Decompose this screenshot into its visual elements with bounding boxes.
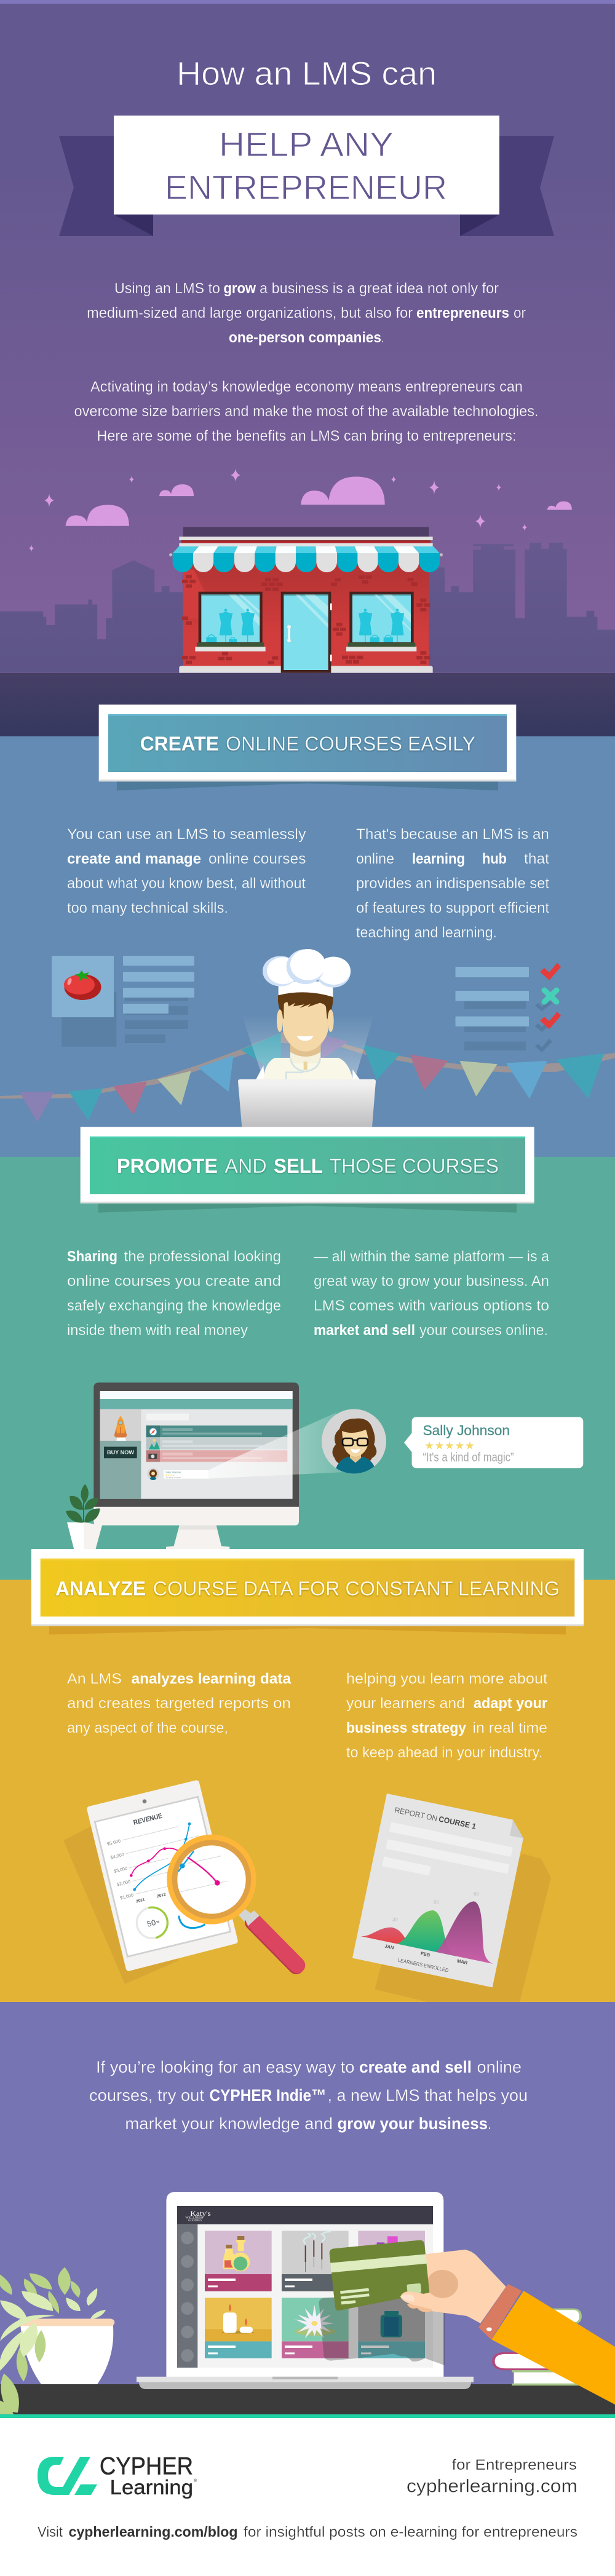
promote: right paragraph: LMS comes with various options to — [314, 1298, 549, 1314]
footer blog line: cypherlearning.com/blog — [69, 2524, 237, 2540]
shop sidebar — [177, 2224, 197, 2368]
course card with tomato — [52, 956, 194, 1047]
product card: lotus — [282, 2298, 349, 2358]
icon: tomato — [64, 971, 101, 1000]
bunting flags — [20, 1033, 604, 1122]
promote: left paragraph: safely exchanging the knowledge — [67, 1298, 281, 1314]
green section background — [0, 1157, 615, 1580]
analyze: right paragraph — [346, 1671, 547, 1761]
awning hooks — [169, 553, 172, 556]
intro paragraph 1: a business is a great idea not only for — [260, 280, 499, 297]
quiz checklist — [455, 963, 561, 1052]
logo wordmark learning: Learning — [110, 2476, 193, 2499]
star rating: ★★★★★ — [424, 1440, 475, 1452]
card and thumb — [330, 2240, 443, 2312]
shadow checks — [535, 1001, 552, 1052]
analyze: right paragraph: business strategy — [346, 1720, 467, 1736]
mini testimonial: Sally Johnson — [165, 1470, 181, 1473]
year labels — [136, 1893, 167, 1904]
store wall — [183, 553, 429, 668]
promote: left paragraph — [67, 1248, 281, 1339]
testimonial avatar — [322, 1409, 386, 1475]
chart value labels: 30 — [392, 1916, 399, 1923]
potted plant — [66, 1484, 102, 1550]
face — [342, 1430, 368, 1457]
create: right paragraph: online — [356, 851, 394, 867]
year labels: 2011 — [136, 1897, 146, 1904]
blue section background — [0, 736, 615, 1157]
sleeve — [491, 2291, 615, 2405]
ribbon right tail — [460, 136, 554, 236]
laptop lid — [166, 2192, 443, 2377]
magnifier lens — [167, 1835, 256, 1924]
footer right text: cypherlearning.com — [407, 2476, 577, 2496]
door — [281, 592, 332, 673]
closing paragraph: , a new LMS that helps you — [327, 2086, 528, 2105]
hair — [278, 992, 333, 1019]
closing paragraph: CYPHER Indie™ — [209, 2086, 326, 2105]
palm shadow — [427, 2270, 458, 2298]
hand holding credit card — [330, 2240, 615, 2405]
chart value labels — [392, 1891, 480, 1923]
chart month labels: FEB — [420, 1951, 431, 1958]
create: right paragraph: of features to support efficient — [356, 900, 549, 916]
stack of books — [493, 2309, 584, 2385]
text bars — [123, 956, 194, 1014]
create: right paragraph — [356, 826, 549, 941]
shirt cuff — [478, 2284, 522, 2339]
chart axis labels: $5,000 — [106, 1838, 121, 1847]
store base — [179, 666, 281, 673]
title: help any: HELP ANY — [219, 125, 394, 163]
magnifier handle — [239, 1907, 297, 1966]
closing paragraph: online — [477, 2058, 522, 2076]
store roof — [183, 527, 429, 537]
shop logo: GOODIES — [188, 2219, 202, 2222]
intro paragraph 1: entrepreneurs — [416, 305, 509, 321]
shop logo — [185, 2209, 211, 2222]
hand shadow on screen — [319, 2294, 445, 2365]
analyze: left paragraph: and creates targeted reports on — [67, 1695, 291, 1712]
intro paragraph 1: medium-sized and large organizations, but also for — [87, 305, 413, 321]
chart axis labels — [106, 1838, 134, 1901]
thumb — [400, 2291, 443, 2312]
chart grid lines — [122, 1827, 234, 1912]
monitor stand — [166, 1526, 229, 1550]
banner shadow — [98, 1203, 517, 1213]
product card: incense — [282, 2231, 349, 2291]
promote: left paragraph: online courses you create and — [67, 1273, 281, 1290]
intro paragraph 1: . — [381, 329, 384, 346]
logo mark — [38, 2457, 97, 2495]
create: right paragraph: learning — [412, 851, 465, 867]
cornice — [179, 537, 433, 540]
product card: candles — [205, 2298, 272, 2358]
create: left paragraph: create and manage — [67, 851, 201, 867]
laptop — [137, 2192, 474, 2389]
create: left paragraph: You can use an LMS to seamlessly — [67, 826, 306, 843]
title: entrepreneur: ENTREPRENEUR — [165, 168, 447, 207]
heading 2 text: PROMOTE — [117, 1155, 218, 1177]
teal rule — [0, 2414, 615, 2418]
chart value labels: 60 — [474, 1891, 480, 1897]
banner frame — [31, 1549, 584, 1626]
monitor chin — [93, 1507, 299, 1526]
books overlap and sleeve — [419, 2250, 615, 2405]
banner frame — [99, 704, 516, 781]
promote: right paragraph: market and sell — [314, 1322, 415, 1339]
chart axis labels: $1,000 — [119, 1892, 134, 1901]
promote: right paragraph: — all within the same platform — is a — [314, 1248, 550, 1265]
product card: oils — [205, 2231, 272, 2291]
heading 2 banner — [81, 1127, 534, 1213]
ribbon white panel — [114, 116, 499, 215]
footer blog line: Visit — [38, 2524, 63, 2540]
donut blue — [179, 1916, 205, 1928]
chart axis labels: $2,000 — [116, 1878, 131, 1888]
create: left paragraph: online courses — [208, 851, 306, 867]
page — [352, 1794, 523, 1987]
chart title: REVENUE — [133, 1813, 164, 1827]
mini testimonial: “It's a kind of magic” — [165, 1476, 181, 1478]
create: left paragraph — [67, 826, 306, 916]
tablet camera — [143, 1799, 146, 1803]
footer right text: for Entrepreneurs — [452, 2457, 577, 2473]
create: right paragraph: provides an indispensable set — [356, 875, 549, 892]
analyze: left paragraph: An LMS — [67, 1671, 122, 1687]
city skyline — [0, 543, 615, 673]
footer blog line — [38, 2524, 577, 2540]
intro paragraph 2: Here are some of the benefits an LMS can bring to entrepreneurs: — [97, 428, 517, 444]
cypher learning logo — [38, 2452, 197, 2499]
card chip — [407, 2283, 421, 2294]
heading 3 text: COURSE DATA FOR CONSTANT LEARNING — [153, 1577, 560, 1599]
area chart — [360, 1901, 493, 1964]
credit card — [330, 2240, 429, 2310]
tablet with revenue chart — [90, 1783, 297, 1968]
leaves — [0, 2267, 81, 2414]
banner inner — [108, 714, 507, 772]
page fold — [510, 1820, 523, 1838]
intro paragraph 1: or — [514, 305, 526, 321]
icon: rocket — [114, 1416, 127, 1441]
awning — [173, 546, 440, 572]
analyze: right paragraph: to keep ahead in your industry. — [346, 1744, 542, 1761]
left window — [195, 592, 266, 652]
closing paragraph: create and sell — [359, 2058, 472, 2076]
placeholder text bars — [382, 1822, 513, 1875]
logo wordmark cypher: CYPHER — [100, 2452, 193, 2479]
analyze: right paragraph: adapt your — [474, 1695, 547, 1712]
shop screen — [177, 2206, 445, 2368]
product card: soap — [358, 2231, 425, 2274]
clouds — [66, 476, 572, 526]
promote: right paragraph — [314, 1248, 550, 1339]
banner inner — [90, 1136, 525, 1194]
storefront — [169, 527, 443, 673]
title line: How an LMS can: How an LMS can — [177, 55, 437, 92]
promote: left paragraph: Sharing — [67, 1248, 117, 1265]
chef jacket — [263, 1058, 353, 1080]
donut 50 percent: 50 — [146, 1918, 157, 1929]
ribbon left fold — [114, 215, 153, 236]
laptop base — [137, 2377, 474, 2382]
footer right text — [407, 2457, 577, 2496]
heading 2 text — [117, 1155, 499, 1177]
closing paragraph: market your knowledge and — [125, 2114, 333, 2133]
closing paragraph — [89, 2058, 528, 2133]
analyze: right paragraph: helping you learn more about — [346, 1671, 547, 1687]
bricks — [182, 575, 430, 664]
revenue lines — [135, 1824, 189, 1889]
create: right paragraph: teaching and learning. — [356, 924, 497, 941]
donut 50 percent — [137, 1907, 167, 1938]
icon: red check — [540, 963, 561, 980]
card shadows — [62, 992, 188, 1047]
top strip — [0, 0, 615, 4]
hair — [332, 1419, 376, 1463]
intro paragraph 2 — [74, 379, 539, 444]
heading 3 banner — [31, 1549, 584, 1634]
tablet shadow — [63, 1819, 178, 1984]
course row 2 — [146, 1438, 287, 1449]
create: left paragraph: too many technical skills. — [67, 900, 228, 916]
create: right paragraph: hub — [482, 851, 507, 867]
intro paragraph 2: overcome size barriers and make the most of the available technologies. — [74, 403, 539, 420]
intro paragraph 1: grow — [224, 280, 256, 297]
cuff button — [486, 2327, 492, 2331]
promote: left paragraph: the professional looking — [124, 1248, 281, 1265]
card stripe — [330, 2254, 427, 2272]
closing paragraph: If you’re looking for an easy way to — [96, 2058, 354, 2076]
shop logo: Katy's — [190, 2209, 211, 2218]
chef hat — [263, 949, 351, 998]
monitor bezel — [93, 1382, 299, 1507]
answer bars — [455, 967, 529, 1026]
yellow section background — [0, 1580, 615, 2002]
promote: left paragraph: inside them with real money — [67, 1322, 248, 1339]
report title: COURSE 1 — [438, 1814, 477, 1831]
intro paragraph 1: Using an LMS to — [114, 280, 220, 297]
page shadow — [375, 1854, 551, 2002]
right window — [346, 592, 416, 652]
heading 2 text: THOSE COURSES — [330, 1155, 499, 1177]
chart axis title: LEARNERS ENROLLED — [397, 1957, 449, 1973]
white shoulder edges — [256, 1065, 264, 1080]
intro background sky — [0, 0, 615, 673]
product card: jar — [358, 2298, 425, 2358]
promote: right paragraph: your courses online. — [419, 1322, 548, 1339]
palm — [419, 2250, 506, 2323]
closing paragraph: grow your business — [337, 2114, 488, 2133]
banner inner — [41, 1559, 574, 1617]
report title — [394, 1806, 477, 1831]
collar — [290, 1058, 320, 1071]
laptop lid — [238, 1079, 376, 1127]
ribbon left tail — [59, 136, 153, 236]
analyze: left paragraph: analyzes learning data — [132, 1671, 292, 1687]
finger tips — [407, 2303, 437, 2312]
intro paragraph 1 — [87, 280, 526, 346]
course row 3 — [146, 1450, 287, 1462]
desktop monitor — [66, 1382, 344, 1550]
neck — [350, 1454, 361, 1463]
thumb nail — [400, 2294, 415, 2302]
year labels: 2012 — [157, 1893, 167, 1899]
create: right paragraph: that — [524, 851, 549, 867]
promote: right paragraph: great way to grow your business. An — [314, 1273, 549, 1290]
glasses — [343, 1438, 368, 1446]
buy now button: BUY NOW — [107, 1449, 134, 1455]
zoom beam — [208, 1412, 344, 1479]
mini testimonial: ★★★★★ — [165, 1474, 175, 1476]
card text lines — [340, 2288, 370, 2304]
pot — [20, 2325, 113, 2384]
tablet body — [90, 1783, 235, 1968]
chart month labels — [384, 1944, 469, 1966]
heading 2 text: AND — [224, 1155, 267, 1177]
closing paragraph: . — [488, 2114, 491, 2133]
shirt — [336, 1457, 374, 1474]
testimonial card — [404, 1417, 583, 1468]
bunting — [0, 1032, 615, 1122]
banner shadow — [49, 1626, 566, 1634]
donut 50 percent: % — [156, 1920, 160, 1924]
create: left paragraph: about what you know best, all without — [67, 875, 306, 892]
chart axis labels: $3,000 — [113, 1865, 128, 1874]
heading 1 banner — [99, 704, 516, 790]
icon: green cross — [544, 990, 557, 1002]
analyze: right paragraph: your learners and — [346, 1695, 465, 1712]
footer blog line: for insightful posts on e-learning for entrepreneurs — [244, 2524, 577, 2540]
analyze: right paragraph: in real time — [472, 1720, 547, 1736]
heading 3 text: ANALYZE — [55, 1577, 146, 1599]
ground band — [0, 673, 615, 736]
testimonial quote: “It's a kind of magic” — [423, 1451, 514, 1465]
closing paragraph: courses, try out — [89, 2086, 204, 2105]
create: right paragraph: That's because an LMS is an — [356, 826, 549, 843]
icon: red check — [540, 1012, 561, 1029]
banner frame — [81, 1127, 534, 1203]
monitor screen — [100, 1391, 293, 1499]
chart month labels: JAN — [384, 1944, 395, 1951]
chart value labels: 50 — [434, 1899, 440, 1905]
closing section background — [0, 2002, 615, 2384]
heading 2 text: SELL — [274, 1155, 323, 1177]
face — [277, 1002, 334, 1052]
mini testimonial — [147, 1468, 208, 1480]
intro paragraph 2: Activating in today’s knowledge economy means entrepreneurs can — [90, 379, 523, 395]
desk — [0, 2384, 615, 2414]
footer background — [0, 2418, 615, 2576]
ribbon right fold — [460, 215, 499, 236]
screen glow — [242, 1014, 373, 1080]
course row 1 — [146, 1425, 287, 1437]
testimonial name: Sally Johnson — [423, 1422, 510, 1438]
smile — [351, 1449, 360, 1453]
potted plant left — [0, 2267, 114, 2414]
report page — [352, 1794, 551, 2002]
shop header — [177, 2206, 433, 2224]
tablet screen — [95, 1797, 231, 1956]
heading 1 text: ONLINE COURSES EASILY — [226, 733, 475, 755]
report title: REPORT ON — [394, 1806, 438, 1823]
buy now button — [104, 1447, 137, 1458]
chart month labels: MAR — [456, 1958, 469, 1966]
neck — [290, 1041, 320, 1063]
banner shadow — [117, 781, 498, 790]
registered mark: ® — [194, 2478, 197, 2483]
bunting string — [0, 1032, 615, 1098]
course card — [52, 956, 114, 1017]
shop logo: WELLNESS — [185, 2217, 203, 2220]
sparkles — [29, 468, 527, 552]
analyze: left paragraph: any aspect of the course, — [67, 1720, 228, 1736]
intro paragraph 1: one-person companies — [229, 329, 381, 346]
title ribbon — [59, 116, 554, 236]
chef at laptop — [238, 949, 376, 1127]
analyze: left paragraph — [67, 1671, 292, 1736]
chart axis labels: $4,000 — [110, 1851, 125, 1861]
shadow bars — [464, 1001, 526, 1050]
heading 1 text: CREATE — [140, 733, 219, 755]
